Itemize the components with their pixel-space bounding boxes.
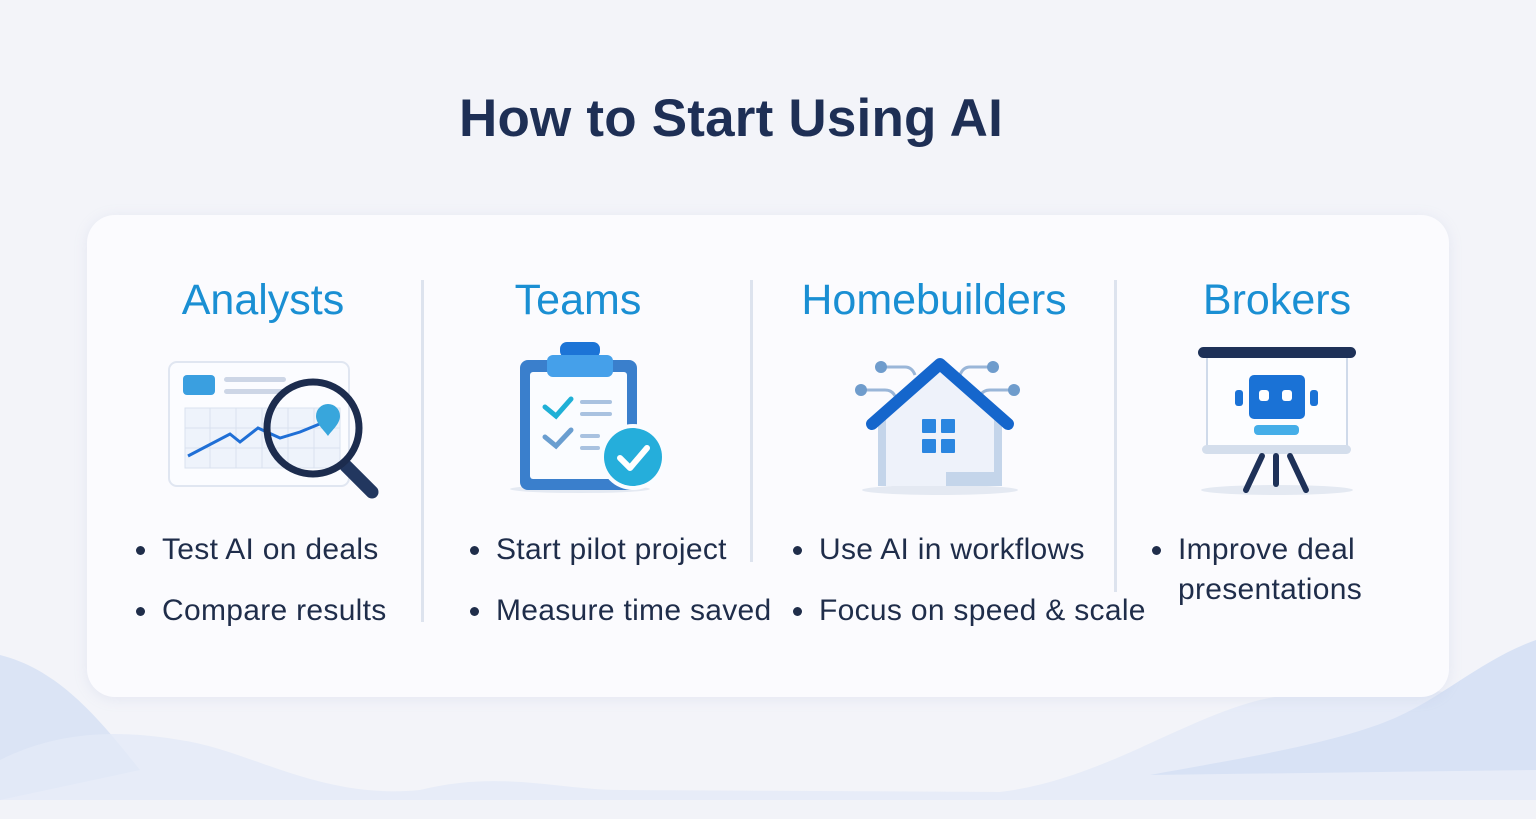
- panel: main card: [87, 215, 1449, 697]
- icon: presentation robot: [1198, 347, 1356, 495]
- bullets: Analysts: Test AI on deals: [162, 533, 379, 566]
- bullets: Teams: Start pilot project: [496, 533, 727, 566]
- heading: Analysts: Analysts: [182, 276, 344, 324]
- title: How to Start Using AI: [459, 89, 1003, 148]
- bullets: Homebuilders: Focus on speed & scale: [819, 594, 1146, 627]
- heading: Teams: Teams: [515, 276, 641, 324]
- bullets: Analysts: [136, 533, 387, 627]
- bullets: Teams: Measure time saved: [496, 594, 772, 627]
- icon: clipboard with check: [510, 342, 662, 493]
- icon: chart with magnifier: [168, 361, 378, 498]
- heading: Homebuilders: Homebuilders: [801, 276, 1067, 324]
- bullets: Homebuilders: [793, 533, 1146, 627]
- bullets: Homebuilders: Use AI in workflows: [819, 533, 1085, 566]
- heading: Brokers: Brokers: [1203, 276, 1351, 324]
- bullets: Brokers: presentations: [1178, 573, 1362, 606]
- bullets: Brokers: Improve deal: [1178, 533, 1355, 566]
- bullets: Teams: [470, 533, 772, 627]
- bullets: Brokers: [1152, 533, 1362, 606]
- bullets: Analysts: Compare results: [162, 594, 387, 627]
- icon: smart house: [855, 358, 1020, 495]
